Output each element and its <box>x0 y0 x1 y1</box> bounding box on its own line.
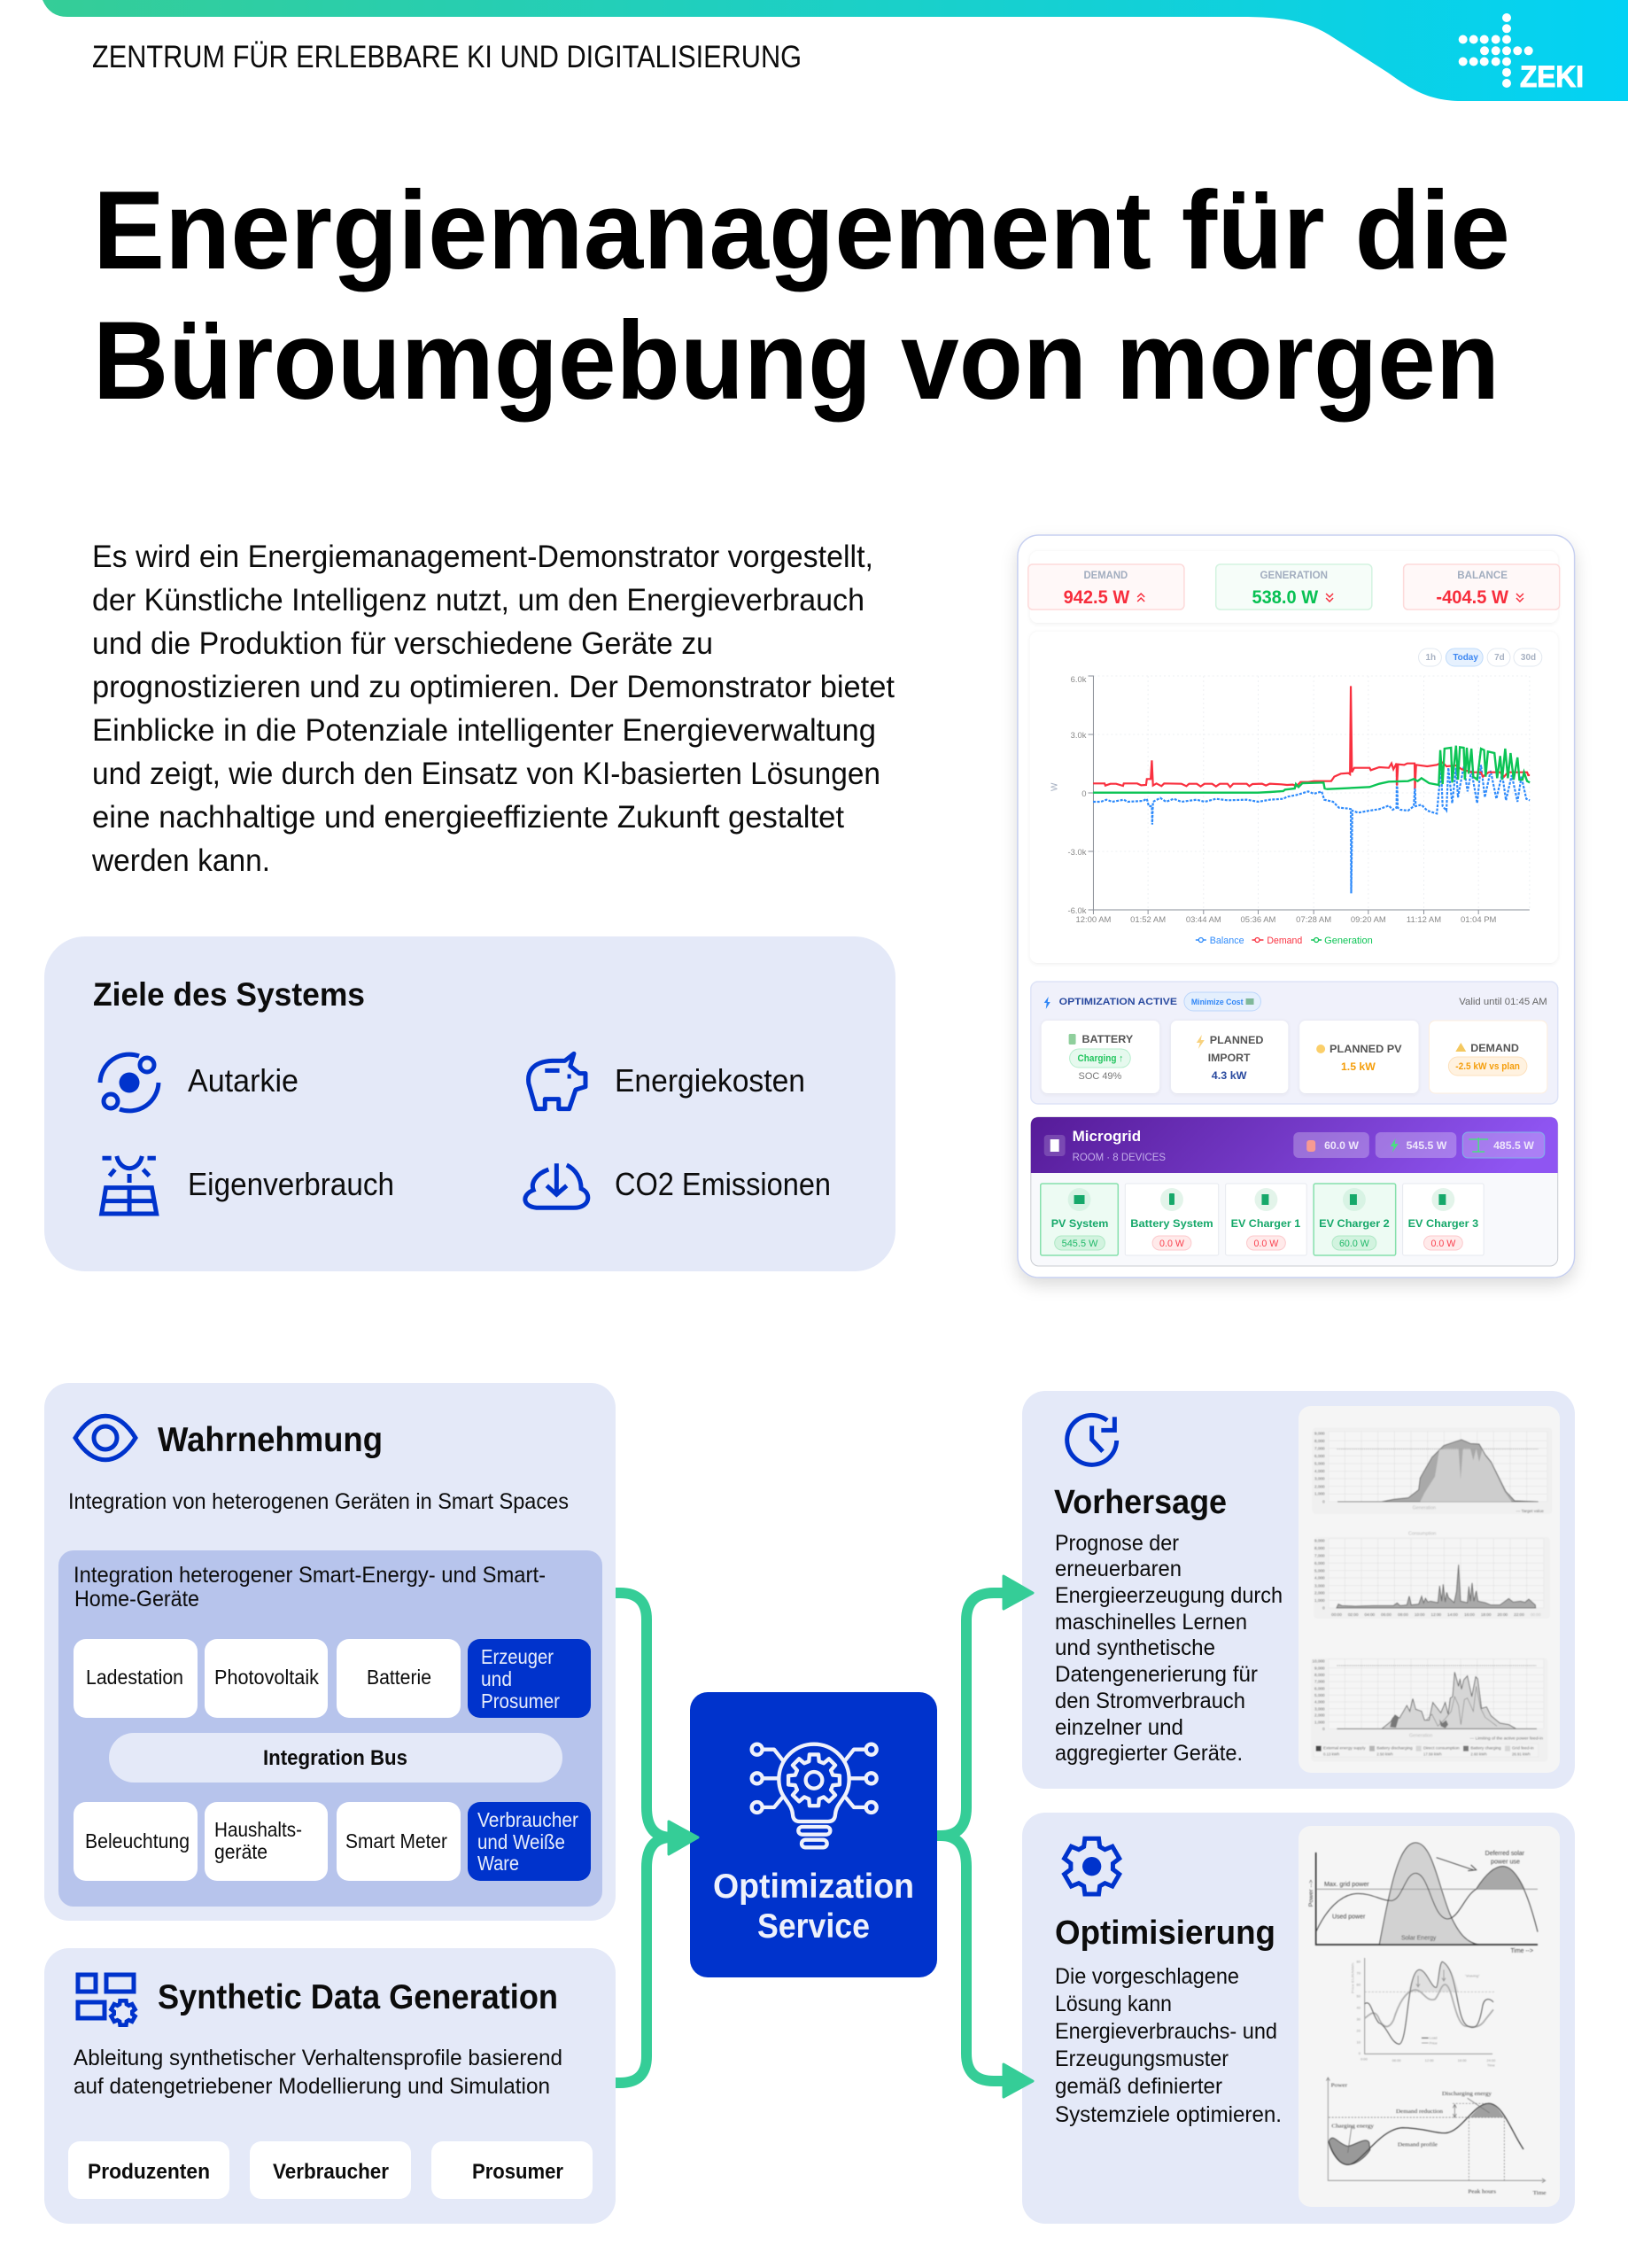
chart legend <box>1196 936 1373 946</box>
description: maschinelles Lernen <box>1055 1610 1247 1635</box>
card: planned import <box>1171 1021 1288 1093</box>
icon: solar panel <box>102 1156 157 1214</box>
panel: dashboard screenshot <box>1018 535 1575 1278</box>
device: EV Charger 1: EV Charger 1 <box>1231 1217 1301 1230</box>
stat cards <box>1028 551 1560 623</box>
title <box>93 169 1510 423</box>
power pills: 545.5 W <box>1407 1139 1447 1152</box>
device: EV Charger 3: 0.0 W <box>1430 1239 1456 1249</box>
chart: consumption forecast: 9,000 <box>1314 1539 1325 1543</box>
stat: demand: 942.5 W <box>1064 587 1129 608</box>
chart: generation and storage: 4,000 <box>1314 1700 1325 1705</box>
box: Batterie <box>337 1639 461 1718</box>
icon: ZEKI logo <box>1459 13 1584 94</box>
chart: peak shaving price and load: 0:00 <box>1361 2056 1368 2061</box>
chart series <box>1093 686 1530 893</box>
chart: peak shaving price and load: 30 <box>1357 2016 1361 2021</box>
device: Battery System: 0.0 W <box>1159 1239 1185 1249</box>
panel: Optimisierung <box>1022 1813 1575 2224</box>
chart: generation and storage: Generation <box>1409 1733 1432 1738</box>
description: einzelner und <box>1055 1715 1183 1740</box>
chart: generation and storage: 2.60 kWh <box>1470 1752 1487 1757</box>
arrow: optimization service to outputs <box>937 1576 1033 2097</box>
chart: deferred solar power: Solar Energy <box>1401 1936 1437 1942</box>
card: demand: DEMAND <box>1470 1044 1519 1054</box>
chart: generation and storage: 26.91 kWh <box>1512 1752 1531 1757</box>
line chart <box>1030 632 1558 963</box>
intro paragraph: eine nachhaltige und energieeffiziente Zukunft gestaltet <box>92 800 844 835</box>
box: Erzeuger und Prosumer: Erzeuger <box>481 1645 554 1668</box>
card: planned pv <box>1299 1021 1419 1093</box>
device: EV Charger 1 <box>1226 1184 1306 1255</box>
chart: generation and storage: 8,000 <box>1314 1673 1325 1677</box>
chart: consumption forecast: 14:00 <box>1447 1612 1458 1617</box>
card: planned pv: 1.5 kW <box>1341 1060 1376 1073</box>
heading: Ziele des Systems: Ziele des Systems <box>93 976 365 1013</box>
description: Energieerzeugung durch <box>1055 1583 1283 1608</box>
intro paragraph: der Künstliche Intelligenz nutzt, um den Energieverbrauch <box>92 583 864 617</box>
header band <box>43 0 1628 101</box>
box: Haushaltsgeräte <box>205 1802 328 1881</box>
intro paragraph: werden kann. <box>91 843 270 878</box>
chart: generation forecast: 8,000 <box>1314 1439 1325 1443</box>
chart: consumption forecast: 22:00 <box>1514 1612 1524 1617</box>
chart: peak shaving price and load: Load <box>1430 2036 1438 2040</box>
microgrid header: ROOM · 8 DEVICES <box>1073 1153 1166 1163</box>
description: Energieverbrauchs- und <box>1055 2019 1277 2044</box>
chart: peak shaving price and load: 10 <box>1357 2039 1361 2044</box>
chart: peak shaving price and load: 70 <box>1357 1970 1361 1975</box>
chart: generation and storage: 5,000 <box>1314 1693 1325 1697</box>
description: auf datengetriebener Modellierung und Simulation <box>74 2074 550 2099</box>
label: CO2 Emissionen: CO2 Emissionen <box>615 1166 831 1202</box>
chart axes and grid <box>1050 675 1530 925</box>
description: Datengenerierung für <box>1055 1662 1258 1687</box>
description: Ableitung synthetischer Verhaltensprofile basierend <box>74 2046 562 2070</box>
chart legend: Balance <box>1210 936 1244 946</box>
box: Erzeuger und Prosumer: Prosumer <box>481 1689 560 1713</box>
chart: generation forecast: 9,000 <box>1314 1431 1325 1435</box>
arrow: inputs to optimization service <box>616 1593 698 2083</box>
card: planned pv: PLANNED PV <box>1330 1045 1402 1055</box>
chart: demand profile: Power <box>1331 2083 1348 2089</box>
chart: generation forecast: 3,000 <box>1314 1477 1325 1481</box>
integration bus <box>109 1733 562 1783</box>
chart: generation forecast: 7,000 <box>1314 1446 1325 1450</box>
chart axes and grid: 6.0k <box>1071 675 1087 685</box>
inner heading: Integration heterogener Smart-Energy- und Smart- <box>74 1563 546 1588</box>
chart: consumption forecast: 7,000 <box>1314 1553 1325 1557</box>
chart: deferred solar power: Max. grid power <box>1324 1882 1369 1888</box>
chart: generation and storage: Direct consumption <box>1423 1745 1460 1750</box>
range buttons: 7d <box>1494 653 1505 663</box>
chart: consumption forecast: 6,000 <box>1314 1561 1325 1565</box>
chart: generation and storage <box>1311 1658 1547 1761</box>
chart: generation and storage: Battery charging <box>1470 1745 1501 1750</box>
chart: consumption forecast: 06:00 <box>1381 1612 1392 1617</box>
chart axes and grid: 01:52 AM <box>1130 915 1166 925</box>
chart axes and grid: 01:04 PM <box>1461 915 1497 925</box>
chart: generation and storage: 2,000 <box>1314 1713 1325 1718</box>
chart: generation forecast: 1,000 <box>1314 1492 1325 1496</box>
device: EV Charger 1: 0.0 W <box>1254 1239 1279 1249</box>
chart: generation forecast: 4,000 <box>1314 1469 1325 1473</box>
chart: peak shaving price and load: 24:00 <box>1486 2058 1496 2062</box>
chart: generation and storage: 6,000 <box>1314 1686 1325 1690</box>
stat: demand: DEMAND <box>1084 571 1128 581</box>
device: EV Charger 3 <box>1403 1184 1484 1255</box>
button: Produzenten <box>68 2141 229 2199</box>
card: battery <box>1042 1021 1159 1093</box>
chart: peak shaving price and load: 18:00 <box>1458 2058 1467 2062</box>
heading: Wahrnehmung: Wahrnehmung <box>158 1421 383 1459</box>
chart legend: Generation <box>1324 936 1373 946</box>
chart: peak shaving price and load: 06:00 <box>1392 2058 1401 2062</box>
box: Photovoltaik: Photovoltaik <box>214 1666 319 1689</box>
optimization active panel <box>1031 982 1558 1104</box>
chart axes and grid: 07:28 AM <box>1296 915 1331 925</box>
inner panel: device integration <box>58 1550 602 1907</box>
box: Beleuchtung <box>74 1802 198 1881</box>
chart: consumption forecast: 5,000 <box>1314 1568 1325 1573</box>
chart: generation and storage: 7,000 <box>1314 1680 1325 1684</box>
device: PV System <box>1041 1184 1118 1255</box>
description: Prognose der <box>1055 1531 1179 1556</box>
button: Verbraucher <box>250 2141 411 2199</box>
chart: consumption forecast: Consumption <box>1408 1532 1436 1537</box>
inner heading: Home-Geräte <box>74 1587 199 1612</box>
box: Ladestation: Ladestation <box>86 1666 183 1689</box>
chart: peak shaving price and load: 50 <box>1357 1993 1361 1998</box>
device: Battery System: Battery System <box>1130 1217 1213 1230</box>
chart: generation forecast: 0 <box>1322 1499 1325 1503</box>
chart: consumption forecast: 12:00 <box>1431 1612 1442 1617</box>
box: Verbraucher und Weiße Ware <box>468 1802 591 1881</box>
description: Lösung kann <box>1055 1992 1172 2016</box>
subtitle: Integration von heterogenen Geräten in Smart Spaces <box>68 1489 569 1514</box>
box: Verbraucher und Weiße Ware: und Weiße <box>477 1830 565 1853</box>
chart: generation and storage: External energy supply <box>1323 1745 1367 1750</box>
box: Erzeuger und Prosumer: und <box>481 1667 512 1690</box>
heading: Synthetic Data Generation: Synthetic Data Generation <box>158 1978 558 2016</box>
box: Batterie: Batterie <box>367 1666 431 1689</box>
chart: generation forecast: 2,000 <box>1314 1484 1325 1488</box>
chart: generation forecast: --- Target value <box>1516 1509 1544 1513</box>
intro paragraph: und zeigt, wie durch den Einsatz von KI-basierten Lösungen <box>92 757 880 791</box>
chart: generation and storage: 17.59 kWh <box>1423 1752 1442 1757</box>
description: Systemziele optimieren. <box>1055 2102 1282 2127</box>
panel: Ziele des Systems <box>44 936 895 1271</box>
box: Optimization Service <box>690 1692 937 1977</box>
chart: consumption forecast: 3,000 <box>1314 1583 1325 1588</box>
chart: deferred solar power: Power --> <box>1308 1880 1314 1907</box>
intro paragraph <box>91 540 895 878</box>
chart axes and grid: -6.0k <box>1067 906 1087 916</box>
chart: generation and storage: Battery discharging <box>1376 1745 1413 1750</box>
chart: demand profile: Time <box>1533 2190 1547 2196</box>
chart axes and grid: 3.0k <box>1071 731 1087 741</box>
chart: peak shaving price and load: Time <box>1487 2063 1495 2068</box>
button: Verbraucher: Verbraucher <box>273 2160 389 2184</box>
chart: deferred solar power <box>1308 1843 1538 1954</box>
panel: Vorhersage <box>1022 1391 1575 1789</box>
description: und synthetische <box>1055 1635 1215 1660</box>
chart: peak shaving price and load: 0 <box>1359 2051 1361 2055</box>
chart: generation and storage: 1,000 <box>1314 1720 1325 1724</box>
chart: generation forecast: 6,000 <box>1314 1454 1325 1458</box>
chart: peak shaving price and load: 12:00 <box>1425 2058 1434 2062</box>
intro paragraph: Es wird ein Energiemanagement-Demonstrator vorgestellt, <box>92 540 873 574</box>
chart axes and grid: 12:00 AM <box>1075 915 1112 925</box>
card: battery: BATTERY <box>1082 1035 1134 1045</box>
heading: Vorhersage: Vorhersage <box>1054 1484 1227 1521</box>
chart: consumption forecast: 04:00 <box>1365 1612 1376 1617</box>
device: EV Charger 2: 60.0 W <box>1339 1239 1369 1249</box>
chart axes and grid: -3.0k <box>1067 848 1087 858</box>
description: gemäß definierter <box>1055 2074 1222 2099</box>
chart: demand profile: Demand profile <box>1398 2142 1438 2148</box>
microgrid header: Microgrid <box>1073 1128 1141 1145</box>
chart: consumption forecast: 10:00 <box>1415 1612 1425 1617</box>
chart: consumption forecast: 1,000 <box>1314 1598 1325 1603</box>
box: Smart Meter <box>337 1802 461 1881</box>
chart: peak shaving price and load: 80 <box>1357 1959 1361 1963</box>
chart: demand profile: Charging energy <box>1331 2124 1375 2130</box>
microgrid header <box>1031 1117 1558 1173</box>
chart: peak shaving price and load: 40 <box>1357 2005 1361 2009</box>
label: Energiekosten: Energiekosten <box>615 1062 805 1099</box>
chart: demand profile: Peak hours <box>1468 2188 1496 2194</box>
chart: consumption forecast: 2,000 <box>1314 1591 1325 1596</box>
badge: minimize cost: Minimize Cost <box>1191 998 1244 1007</box>
range buttons <box>1419 649 1542 666</box>
label: Optimization Service: Optimization <box>713 1868 914 1906</box>
chart: consumption forecast: 02:00 <box>1348 1612 1359 1617</box>
power pills <box>1293 1132 1545 1158</box>
chart: generation and storage: 0.13 kWh <box>1323 1752 1340 1757</box>
box: Photovoltaik <box>205 1639 328 1718</box>
stat: balance <box>1404 564 1560 610</box>
chart axes and grid: W <box>1050 782 1060 791</box>
button: Produzenten: Produzenten <box>88 2160 210 2184</box>
panel: Wahrnehmung <box>44 1383 616 1921</box>
optimization charts image <box>1299 1826 1560 2207</box>
chart: consumption forecast: 4,000 <box>1314 1576 1325 1581</box>
stat: balance: BALANCE <box>1457 571 1508 581</box>
heading: Optimisierung: Optimisierung <box>1055 1915 1275 1952</box>
range buttons: Today <box>1453 653 1478 663</box>
stat: generation: GENERATION <box>1260 571 1328 581</box>
device: EV Charger 2: EV Charger 2 <box>1319 1217 1390 1230</box>
description <box>74 2046 562 2099</box>
stat: generation <box>1216 564 1372 610</box>
microgrid panel <box>1031 1117 1558 1266</box>
box: Beleuchtung: Beleuchtung <box>85 1829 190 1852</box>
stat: demand <box>1028 564 1184 610</box>
chart: consumption forecast: 18:00 <box>1481 1612 1492 1617</box>
power pills: 60.0 W <box>1324 1139 1360 1152</box>
chart axes and grid: 09:20 AM <box>1351 915 1386 925</box>
chart: generation forecast: 5,000 <box>1314 1462 1325 1466</box>
icon: cloud download <box>525 1163 588 1208</box>
box: Smart Meter: Smart Meter <box>345 1829 447 1852</box>
chart: consumption forecast: 0 <box>1322 1606 1325 1611</box>
chart: deferred solar power: Deferred solar <box>1485 1851 1525 1857</box>
box: Erzeuger und Prosumer <box>468 1639 591 1718</box>
box: Verbraucher und Weiße Ware: Ware <box>477 1852 519 1875</box>
card: battery: Charging ↑ <box>1078 1053 1123 1064</box>
chart: consumption forecast: 00:00 <box>1531 1612 1541 1617</box>
chart: peak shaving price and load: Price <box>1430 2040 1438 2045</box>
chart: generation and storage: 9,000 <box>1314 1666 1325 1670</box>
label: Optimization Service <box>713 1868 914 1946</box>
chart: peak shaving price and load: Price EUR/MWh <box>1351 1963 1355 1993</box>
chart: generation and storage: Grid feed-in <box>1512 1745 1534 1750</box>
validity note: Valid until 01:45 AM <box>1459 997 1547 1007</box>
intro paragraph: Einblicke in die Potenziale intelligenter Energieverwaltung <box>92 713 876 748</box>
card: demand <box>1429 1021 1547 1093</box>
chart: peak shaving price and load <box>1351 1958 1496 2068</box>
range buttons: 30d <box>1521 653 1536 663</box>
icon: piggy bank <box>529 1053 585 1109</box>
chart legend: Demand <box>1267 936 1302 946</box>
icon: ZEKI logo: ZEKI <box>1520 60 1584 94</box>
card: demand: -2.5 kW vs plan <box>1455 1061 1520 1072</box>
chart: consumption forecast <box>1314 1532 1550 1619</box>
chart axes and grid: 05:36 AM <box>1241 915 1276 925</box>
chart: consumption forecast: 16:00 <box>1464 1612 1475 1617</box>
chart: consumption forecast: 00:00 <box>1331 1612 1342 1617</box>
chart: demand profile: Demand reduction <box>1396 2109 1444 2115</box>
chart: peak shaving price and load: 60 <box>1357 1982 1361 1986</box>
chart: generation forecast: Generation <box>1413 1506 1436 1511</box>
chart: generation and storage: 3,000 <box>1314 1706 1325 1711</box>
device: PV System: 545.5 W <box>1062 1239 1098 1249</box>
box: Ladestation <box>74 1639 198 1718</box>
button: Prosumer: Prosumer <box>472 2160 563 2184</box>
integration bus: Integration Bus <box>263 1746 407 1770</box>
chart: consumption forecast: 08:00 <box>1398 1612 1408 1617</box>
card: planned import: IMPORT <box>1208 1053 1251 1064</box>
chart: demand profile <box>1326 2078 1547 2196</box>
intro paragraph: und die Produktion für verschiedene Geräte zu <box>92 626 713 661</box>
chart axes and grid: 03:44 AM <box>1186 915 1221 925</box>
chart: peak shaving price and load: "shaving" <box>1465 1974 1480 1978</box>
device: EV Charger 2 <box>1314 1184 1396 1255</box>
range buttons: 1h <box>1425 653 1436 663</box>
chart: demand profile: Discharging energy <box>1442 2091 1492 2097</box>
box: Haushaltsgeräte: Haushalts- <box>214 1818 302 1841</box>
forecast charts image <box>1299 1406 1560 1773</box>
intro paragraph: prognostizieren und zu optimieren. Der Demonstrator bietet <box>92 670 895 704</box>
title: Büroumgebung von morgen <box>93 299 1500 423</box>
badge: minimize cost <box>1184 992 1260 1011</box>
button: Prosumer <box>431 2141 593 2199</box>
icon: Autarkie orbit <box>100 1054 159 1111</box>
description: aggregierter Geräte. <box>1055 1741 1243 1766</box>
stat: balance: -404.5 W <box>1436 587 1508 608</box>
description <box>1055 1964 1282 2127</box>
chart: consumption forecast: 8,000 <box>1314 1546 1325 1550</box>
chart: generation and storage: 10,000 <box>1312 1659 1325 1664</box>
chart: peak shaving price and load: 20 <box>1357 2028 1361 2032</box>
card: planned import: 4.3 kW <box>1212 1069 1247 1082</box>
panel: Synthetic Data Generation <box>44 1948 616 2224</box>
heading: optimization active: OPTIMIZATION ACTIVE <box>1059 997 1177 1007</box>
description: Die vorgeschlagene <box>1055 1964 1239 1989</box>
stat: generation: 538.0 W <box>1252 587 1318 608</box>
description: den Stromverbrauch <box>1055 1689 1245 1713</box>
organisation line: ZENTRUM FÜR ERLEBBARE KI UND DIGITALISIERUNG <box>92 40 802 74</box>
chart: consumption forecast: 20:00 <box>1498 1612 1508 1617</box>
icon: AI lightbulb <box>752 1744 877 1847</box>
chart axes and grid: 0 <box>1081 789 1086 799</box>
description: Erzeugungsmuster <box>1055 2047 1229 2071</box>
icon: clock with arrow <box>1067 1415 1117 1464</box>
box: Haushaltsgeräte: geräte <box>214 1840 267 1863</box>
chart: generation and storage: 2.50 kWh <box>1376 1752 1393 1757</box>
chart: generation forecast <box>1313 1428 1552 1514</box>
label: Optimization Service: Service <box>757 1907 870 1946</box>
chart: deferred solar power: Used power <box>1332 1915 1366 1921</box>
icon: eye <box>75 1416 136 1460</box>
chart: deferred solar power: power use <box>1491 1859 1520 1865</box>
device: PV System: PV System <box>1051 1217 1108 1230</box>
description <box>1055 1531 1283 1766</box>
device: Battery System <box>1125 1184 1219 1255</box>
label: Autarkie: Autarkie <box>188 1062 298 1099</box>
card: battery: SOC 49% <box>1079 1071 1122 1082</box>
chart: generation and storage: --- Limiting of the active power feed-in <box>1469 1736 1543 1741</box>
description: erneuerbaren <box>1055 1557 1182 1581</box>
device: EV Charger 3: EV Charger 3 <box>1408 1217 1479 1230</box>
icon: lightning <box>1044 997 1050 1009</box>
icon: gear <box>1065 1838 1120 1894</box>
box: Verbraucher und Weiße Ware: Verbraucher <box>477 1808 578 1831</box>
icon: data blocks with gear <box>78 1975 136 2025</box>
label: Eigenverbrauch: Eigenverbrauch <box>188 1166 394 1202</box>
inner heading <box>74 1563 546 1612</box>
chart: deferred solar power: Time --> <box>1510 1948 1533 1954</box>
chart axes and grid: 11:12 AM <box>1407 915 1441 925</box>
card: planned import: PLANNED <box>1210 1036 1263 1046</box>
chart: generation and storage: 0 <box>1322 1727 1325 1731</box>
title: Energiemanagement für die <box>93 169 1510 292</box>
power pills: 485.5 W <box>1493 1139 1535 1152</box>
